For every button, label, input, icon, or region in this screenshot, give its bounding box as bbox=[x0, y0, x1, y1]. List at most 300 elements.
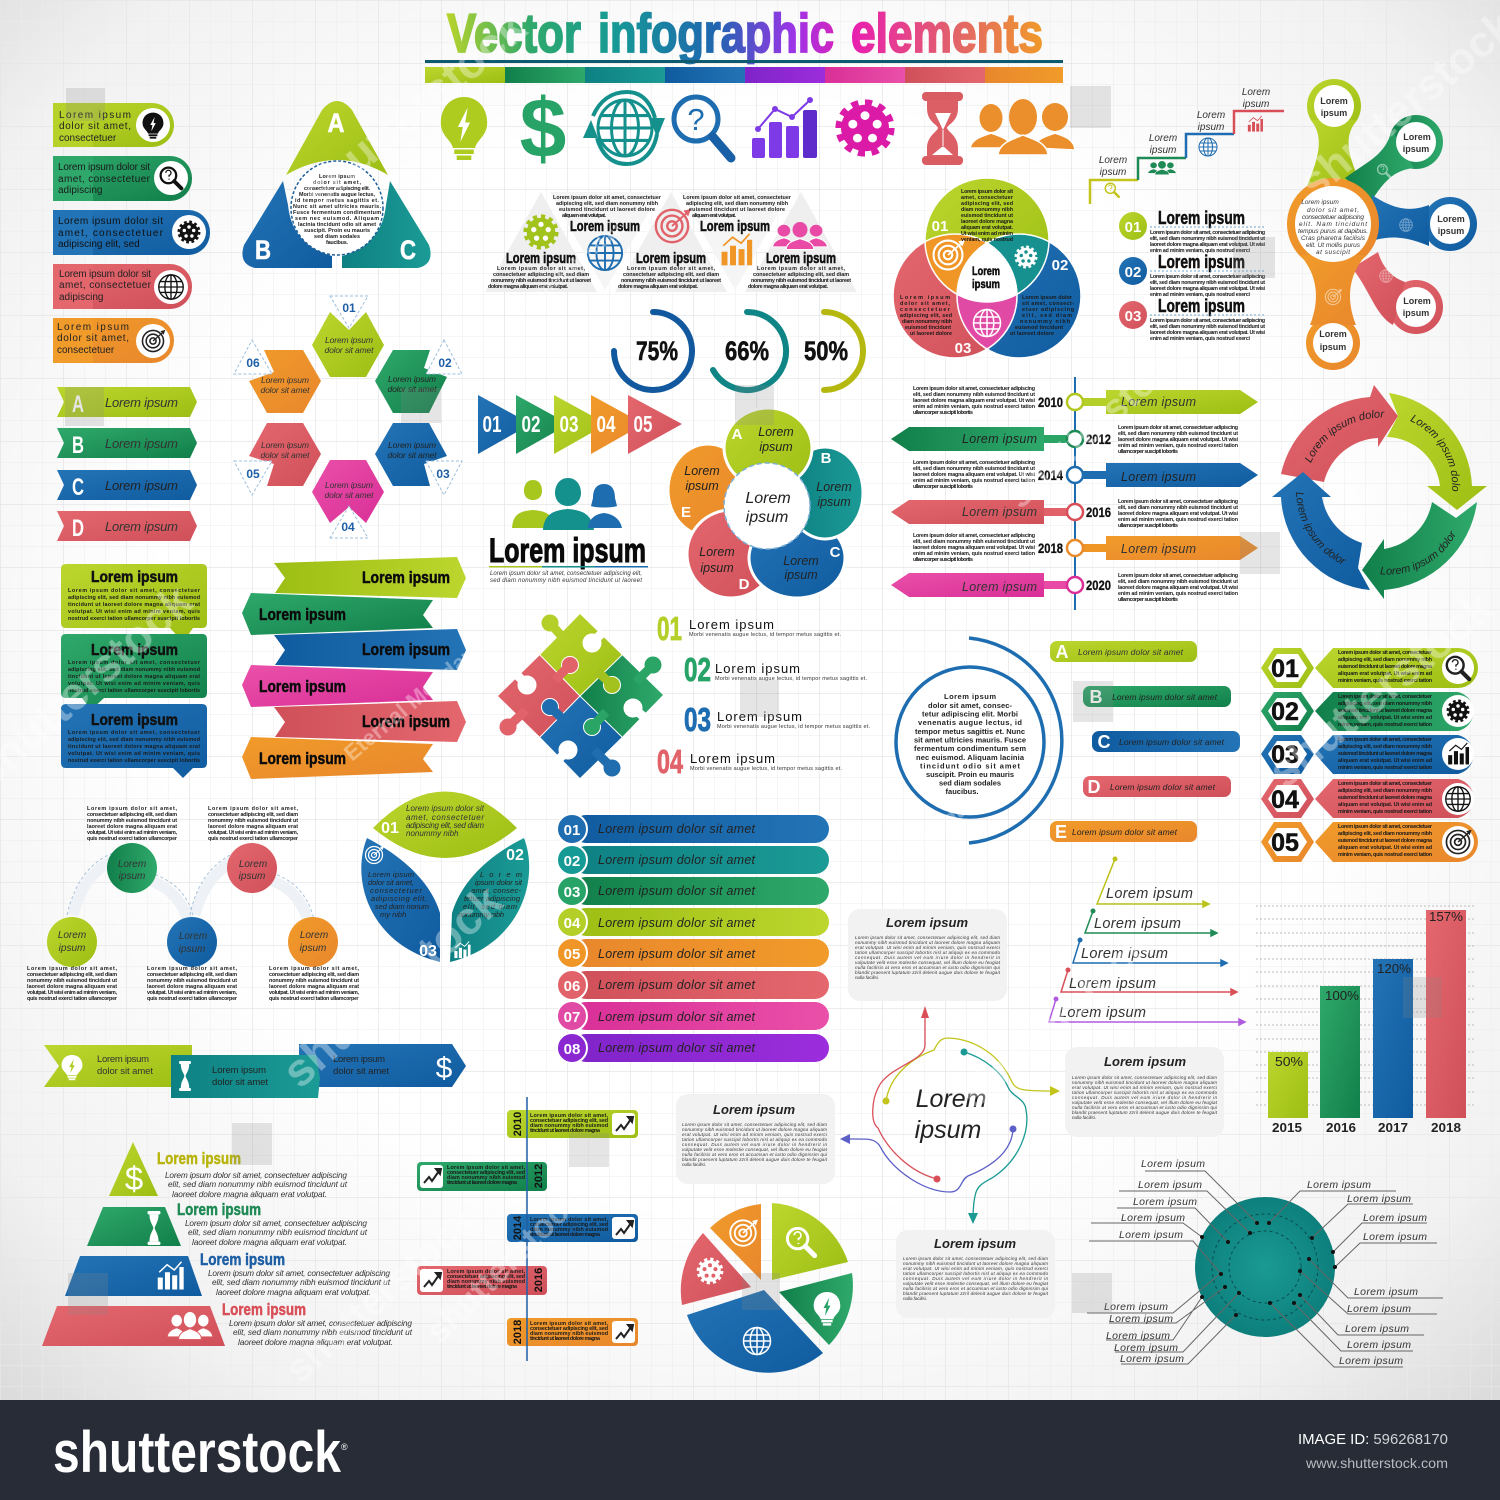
node blue bbox=[1372, 195, 1477, 251]
card left: consequat. Duis autem vel eum iriure dolor in hendrerit in bbox=[682, 1142, 827, 1147]
centre text: id tempor metus sagittis et. bbox=[295, 198, 380, 204]
petal letters: B bbox=[821, 450, 832, 467]
band 02: 02 bbox=[1271, 698, 1299, 726]
ribbon B bbox=[57, 428, 197, 459]
label arrow lime: Lorem ipsum bbox=[1106, 886, 1193, 902]
bar B: Lorem ipsum dolor sit amet bbox=[1112, 692, 1218, 702]
timeline text blocks: elit, sed diam nonummy nibh euismod tincidunt ut bbox=[1118, 505, 1238, 511]
node orange bbox=[288, 917, 338, 967]
card 2010: tincidunt ut laoreet dolore magna bbox=[530, 1128, 601, 1134]
list item 02: Lorem ipsum bbox=[1158, 252, 1245, 272]
venn outlines bbox=[893, 178, 1081, 358]
hexagon 04: 04 bbox=[341, 520, 355, 534]
tree text: nonummy nibh euismod tincidunt ut bbox=[147, 978, 237, 984]
band text: minim veniam, quis nostrud exerci tation bbox=[1338, 809, 1432, 815]
panel: staircase bbox=[1090, 87, 1284, 204]
card green: Lorem ipsum bbox=[91, 642, 178, 659]
pill red: adipiscing bbox=[59, 292, 103, 303]
venn text: etuer adipiscing bbox=[1022, 307, 1074, 313]
card lime: adipiscing elit, sed diam nonummy nibh euismod bbox=[68, 595, 200, 601]
level blue: laoreet dolore magna aliquam erat volutpat. bbox=[216, 1287, 371, 1297]
band 04: 04 bbox=[1271, 786, 1299, 814]
card 2018: diam nonummy nibh euismod bbox=[530, 1331, 608, 1337]
arrow 2010: Lorem ipsum bbox=[1121, 395, 1196, 409]
watermark overlay: shutterstock bbox=[277, 1198, 485, 1392]
panel: alternating ribbons bbox=[242, 557, 466, 779]
overlap orange bbox=[926, 234, 986, 293]
card blue: Lorem ipsum bbox=[91, 712, 178, 729]
hexagon 05 bbox=[234, 423, 321, 495]
label arrow green bbox=[1085, 908, 1217, 936]
petal labels: Lorem bbox=[816, 480, 852, 494]
radial labels: Lorem ipsum bbox=[1363, 1231, 1427, 1243]
dashed rings bbox=[1212, 1214, 1318, 1320]
band text: euismod tincidunt ut laoreet dolore magna bbox=[1338, 708, 1433, 714]
band text: minim veniam, quis nostrud exerci tation bbox=[1338, 722, 1432, 728]
petal letters: E bbox=[681, 504, 691, 521]
timeline text blocks: Lorem ipsum dolor sit amet, consectetuer adipiscing bbox=[1118, 573, 1238, 579]
bar 07 bbox=[557, 1001, 829, 1031]
circle text: sit amet ultricies mauris. Fusce bbox=[914, 736, 1026, 744]
venn text: elit, sed diam bbox=[1022, 313, 1072, 319]
card lime bbox=[61, 564, 207, 642]
leaf teal bbox=[450, 838, 529, 962]
circle blue bbox=[957, 234, 1081, 358]
band text: Lorem ipsum dolor sit amet, consectetuer bbox=[1338, 781, 1433, 787]
tree text: quis nostrud exerci tation ullamcorper bbox=[208, 836, 299, 842]
card blue: tincidunt ut laoreet dolore magna aliquam erat bbox=[68, 744, 200, 750]
circle text: faucibus. bbox=[946, 787, 978, 796]
tile titles: Lorem ipsum bbox=[766, 250, 836, 267]
timeline text blocks: elit, sed diam nonummy nibh euismod tincidunt ut bbox=[1118, 579, 1238, 585]
hexagon 03: 03 bbox=[436, 467, 450, 481]
radial labels: Lorem ipsum bbox=[1363, 1212, 1427, 1224]
card right: consequat. Duis autem vel eum iriure dolor in hendrerit in bbox=[1072, 1095, 1217, 1100]
tiles bbox=[485, 192, 857, 292]
hexagon 05: Lorem ipsum bbox=[261, 440, 309, 450]
tree text: consectetuer adipiscing elit, sed diam bbox=[147, 972, 237, 978]
card left: erat volutpat. Ut wisi enim ad minim veniam, quis nostrud exerci bbox=[682, 1132, 828, 1137]
card 2014 bbox=[507, 1214, 638, 1242]
interlocking seams bbox=[540, 614, 622, 737]
card bottom bbox=[896, 1230, 1055, 1318]
card bottom: Lorem ipsum bbox=[934, 1236, 1016, 1251]
title: Vector bbox=[447, 2, 581, 64]
faint node icons bbox=[1325, 165, 1412, 305]
circle text: Lorem ipsum bbox=[944, 692, 996, 701]
card blue: nostrud exerci tation ullamcorper suscipit lobortis bbox=[68, 758, 200, 764]
tree text: consectetuer adipiscing elit, sed diam bbox=[87, 812, 177, 818]
venn numbers: 03 bbox=[955, 340, 971, 357]
bar 01: Lorem ipsum dolor sit amet bbox=[598, 822, 756, 836]
panel: people heading bbox=[489, 478, 648, 584]
tile text: adipiscing elit, sed diam nonummy nibh bbox=[556, 201, 658, 207]
card 2010: consectetuer adipiscing elit, sed bbox=[530, 1118, 608, 1124]
item 02: Lorem ipsum bbox=[715, 661, 800, 676]
bar B bbox=[1083, 686, 1231, 707]
band text: adipiscing elit, sed diam nonummy nibh bbox=[1338, 657, 1432, 663]
ribbon A bbox=[57, 387, 197, 418]
venn text: Ut wisi enim ad minim bbox=[961, 231, 1013, 237]
icon: light bulb bbox=[441, 97, 487, 160]
bar 03 bbox=[557, 876, 829, 906]
ribbon magenta: Lorem ipsum bbox=[259, 677, 346, 696]
bar D: Lorem ipsum dolor sit amet bbox=[1110, 782, 1216, 792]
centre text circle bbox=[291, 161, 383, 255]
band text: minim veniam, quis nostrud exerci tation bbox=[1338, 765, 1432, 771]
list item 01: elit, sed diam nonummy nibh euismod tincidunt ut bbox=[1150, 236, 1265, 242]
card green: Lorem ipsum dolor sit amet, consectetuer bbox=[68, 660, 201, 666]
banner lime bbox=[44, 1045, 192, 1087]
timeline text blocks: Lorem ipsum dolor sit amet, consectetuer adipiscing bbox=[913, 533, 1035, 539]
pill green bbox=[53, 156, 192, 201]
band 01 bbox=[1261, 648, 1478, 688]
timeline cards bbox=[417, 1110, 638, 1346]
label arrow red bbox=[1061, 968, 1237, 995]
petal labels: Lorem bbox=[684, 464, 720, 478]
timeline text blocks: enim ad minim veniam, quis nostrud exerci tation bbox=[1118, 443, 1238, 449]
band text bbox=[1338, 650, 1433, 858]
bar 2017: 2017 bbox=[1378, 1120, 1408, 1135]
band text: Lorem ipsum dolor sit amet, consectetuer bbox=[1338, 824, 1433, 830]
leaf teal: tetuer adipiscing bbox=[464, 894, 521, 903]
ribbon lime bbox=[274, 557, 466, 598]
card bottom: nulla facilisis at vero eros et accumsan et iusto odio dignissim qui bbox=[903, 1286, 1049, 1291]
bar 08: Lorem ipsum dolor sit amet bbox=[598, 1041, 756, 1055]
tile text: Lorem ipsum dolor sit amet, bbox=[757, 266, 846, 272]
pill blue: Lorem ipsum dolor sit bbox=[58, 216, 163, 227]
tile text: consectetuer adipiscing elit, sed diam bbox=[493, 272, 589, 278]
panel: overlapping banners bbox=[44, 1044, 466, 1098]
list item 02: 02 bbox=[1125, 264, 1141, 281]
icon: rising bar chart bbox=[752, 97, 817, 158]
card bottom: Lorem ipsum dolor sit amet, consectetuer adipiscing elit, sed diam bbox=[903, 1256, 1048, 1261]
bar D: D bbox=[1088, 777, 1100, 797]
card 2016: consectetuer adipiscing elit, sed bbox=[447, 1274, 525, 1280]
icon: hourglass bbox=[922, 92, 963, 165]
card green bbox=[61, 634, 207, 710]
item 01: Morbi venenatis augue lectus, id tempor metus sagittis et. bbox=[689, 632, 841, 638]
circle text: nec euismod. Aliquam lacinia bbox=[916, 753, 1025, 762]
level green: elit, sed diam nonummy nibh euismod tincidunt ut bbox=[188, 1227, 368, 1237]
ribbon orange bbox=[242, 737, 433, 779]
band text: aliquam erat volutpat. Ut wisi enim ad bbox=[1338, 671, 1432, 677]
caption bbox=[490, 571, 642, 584]
bar 05: 05 bbox=[564, 946, 580, 963]
circle text: fermentum condimentum sem bbox=[914, 744, 1026, 753]
card 2012 bbox=[417, 1162, 547, 1191]
list item 01: laoreet dolore magna aliquam erat volutpat. Ut wisi bbox=[1150, 242, 1266, 248]
card top: erat volutpat. Ut wisi enim ad minim veniam, quis nostrud exerci bbox=[855, 945, 1001, 950]
panel: cycle arrows bbox=[1272, 385, 1487, 599]
tree text: laoreet dolore magna aliquam erat bbox=[27, 984, 117, 990]
bar 02 bbox=[557, 845, 829, 875]
panel: five-petal diagram bbox=[668, 408, 863, 598]
bar 04: 04 bbox=[564, 915, 581, 932]
card top: nulla facilisi. bbox=[855, 975, 879, 980]
panel: vertical timeline bbox=[417, 1097, 638, 1361]
card 2010: Lorem ipsum dolor sit amet, bbox=[530, 1113, 608, 1119]
ribbon A: A bbox=[72, 391, 84, 418]
overlap magenta bbox=[958, 296, 1016, 348]
band 05 bbox=[1261, 822, 1478, 862]
list item 03: laoreet dolore magna aliquam erat volutpat. Ut wisi bbox=[1150, 330, 1266, 336]
panel: numbered triangle arrows bbox=[478, 395, 682, 454]
leaf blue: adipiscing elit, bbox=[371, 894, 427, 903]
band text: Lorem ipsum dolor sit amet, consectetuer bbox=[1338, 694, 1433, 700]
node orange hub bbox=[1287, 178, 1379, 370]
watermark squares bbox=[65, 86, 1442, 1315]
circuit label bbox=[915, 1085, 986, 1144]
tree text: Lorem ipsum dolor sit amet, bbox=[87, 806, 178, 812]
segment C bbox=[342, 181, 431, 268]
step labels: Lorem bbox=[1242, 87, 1270, 98]
arrow 2018 bbox=[1038, 536, 1258, 560]
hexagon 04: dolor sit amet bbox=[324, 490, 374, 500]
panel: puzzle list bbox=[657, 610, 870, 780]
pill blue bbox=[53, 210, 210, 255]
venn text: diam nonummy nibh bbox=[961, 207, 1013, 213]
ribbon lime: Lorem ipsum bbox=[362, 568, 450, 587]
pill red: amet, consectetuer bbox=[59, 280, 152, 291]
leader dots bbox=[1200, 1221, 1337, 1317]
list item 03: Lorem ipsum bbox=[1158, 296, 1245, 316]
watermark overlay: Eternal Monday bbox=[838, 788, 983, 909]
circle text bbox=[914, 692, 1026, 796]
card 2012: Lorem ipsum dolor sit amet, bbox=[447, 1165, 526, 1171]
circle text: tetur adipiscing elit. Morbi bbox=[922, 710, 1018, 718]
pill blue: adipiscing elit, sed bbox=[58, 239, 140, 250]
ribbon green: Lorem ipsum bbox=[259, 605, 346, 624]
segment A bbox=[286, 101, 388, 175]
title bbox=[447, 2, 1043, 64]
venn icons bbox=[934, 240, 1036, 336]
card 2016: 2016 bbox=[533, 1268, 545, 1292]
outer arc bbox=[969, 638, 1062, 843]
node labels: ipsum bbox=[1320, 342, 1346, 352]
venn text: euismod tincidunt ut bbox=[961, 213, 1013, 219]
icon: dollar sign: $ bbox=[520, 81, 566, 175]
arrow 2010: 2010 bbox=[1038, 394, 1063, 410]
card bottom: consequat. Duis autem vel eum iriure dolor in hendrerit in bbox=[903, 1276, 1048, 1281]
bar 03: 03 bbox=[564, 884, 580, 901]
tree text: volutpat. Ut wisi enim ad minim veniam, bbox=[27, 990, 118, 996]
card lime: Lorem ipsum bbox=[91, 569, 178, 586]
image id: IMAGE ID: 596268170 bbox=[1298, 1431, 1448, 1448]
bar D bbox=[1083, 776, 1231, 797]
arrow 04: 04 bbox=[596, 411, 616, 437]
bar A: Lorem ipsum dolor sit amet bbox=[1078, 647, 1184, 657]
panel: venn diagram bbox=[893, 178, 1081, 358]
card green: tincidunt ut laoreet dolore magna aliquam erat bbox=[68, 674, 200, 680]
panel: text circle bbox=[896, 638, 1062, 843]
letters: C bbox=[400, 235, 416, 265]
panel: hex numbered bands bbox=[1261, 648, 1478, 862]
label arrow purple bbox=[1049, 996, 1245, 1025]
leaf lime: adipiscing elit, sed diam bbox=[406, 821, 484, 830]
band text: aliquam erat volutpat. Ut wisi enim ad bbox=[1338, 845, 1432, 851]
circuit label: Lorem bbox=[916, 1085, 986, 1113]
gauge 75%: 75% bbox=[636, 336, 678, 366]
band text: minim veniam, quis nostrud exerci tation bbox=[1338, 678, 1432, 684]
label arrow purple: Lorem ipsum bbox=[1059, 1005, 1146, 1021]
tree text: quis nostrud exerci tation ullamcorper bbox=[269, 996, 360, 1002]
ribbon D: D bbox=[72, 515, 84, 542]
caption: sed diam nonummy nibh euismod tincidunt ut laoreet bbox=[490, 578, 642, 584]
petal labels: ipsum bbox=[746, 509, 788, 526]
cycle labels bbox=[1296, 410, 1460, 575]
bar 01: 01 bbox=[564, 822, 580, 839]
bar 2016: 100% bbox=[1325, 988, 1359, 1003]
leaf blue: consectetuer bbox=[370, 886, 422, 895]
ribbon B: Lorem ipsum bbox=[105, 436, 178, 451]
bar A bbox=[1050, 641, 1197, 662]
tile text bbox=[488, 195, 851, 290]
node green: ipsum bbox=[119, 871, 145, 882]
card left: nulla facilisis at vero eros et accumsan et iusto odio dignissim qui bbox=[682, 1152, 828, 1157]
level green: Lorem ipsum bbox=[177, 1200, 261, 1219]
card 2010: 2010 bbox=[512, 1112, 524, 1136]
timeline axis bbox=[1074, 377, 1076, 610]
pill blue: amet, consectetuer bbox=[58, 228, 164, 239]
chart: growth bars bbox=[1256, 906, 1476, 1135]
centre text: Nunc sit amet ultricies mauris. bbox=[293, 204, 382, 210]
node red: Lorem bbox=[239, 859, 267, 870]
venn centre label: ipsum bbox=[972, 277, 1000, 291]
petal E bbox=[668, 444, 748, 536]
bar 08: 08 bbox=[564, 1041, 580, 1058]
bar 06 bbox=[557, 970, 829, 1000]
ribbon blue bbox=[274, 629, 466, 670]
band text: adipiscing elit, sed diam nonummy nibh bbox=[1338, 701, 1432, 707]
hub text: Cras pharetra facilisis bbox=[1301, 235, 1366, 242]
registered mark: ® bbox=[341, 1442, 348, 1452]
centre text: sem nec euismod. Aliquam bbox=[295, 216, 379, 222]
timeline text blocks: enim ad minim veniam, quis nostrud exerci tation bbox=[913, 551, 1035, 557]
panel: A B C D ribbons bbox=[57, 387, 197, 542]
petal C bbox=[749, 518, 845, 598]
pill lime: consectetuer bbox=[59, 133, 117, 144]
hub text: dolor sit amet, bbox=[1307, 207, 1359, 214]
arrow 01 bbox=[478, 395, 531, 454]
card right: erat volutpat. Ut wisi enim ad minim veniam, quis nostrud exerci bbox=[1072, 1085, 1218, 1090]
card green: volutpat. Ut wisi enim ad minim veniam, quis bbox=[68, 681, 200, 687]
node red bbox=[1352, 252, 1443, 334]
label arrow lime bbox=[1097, 856, 1209, 907]
venn text: dolor sit amet, bbox=[900, 301, 950, 307]
node lime: ipsum bbox=[59, 943, 85, 954]
list item 03: Lorem ipsum dolor sit amet, consectetuer adipiscing bbox=[1150, 318, 1265, 324]
leader lines bbox=[1087, 1171, 1443, 1367]
card top: nonummy nibh euismod tincidunt ut laoreet dolore magna aliquam bbox=[855, 940, 1000, 945]
node labels: ipsum bbox=[1438, 226, 1464, 236]
leaf teal: 02 bbox=[506, 847, 524, 864]
tile text: nonummy nibh euismod tincidunt ut laoreet bbox=[621, 278, 721, 284]
panel: pyramid bbox=[42, 1142, 413, 1347]
bar 02: Lorem ipsum dolor sit amet bbox=[598, 853, 756, 867]
band text: aliquam erat volutpat. Ut wisi enim ad bbox=[1338, 802, 1432, 808]
pill orange bbox=[53, 318, 174, 363]
pill red: Lorem ipsum dolor sit bbox=[59, 269, 151, 280]
card left: blandit praesent luptatum zzril delenit augue duis dolore te feugait bbox=[682, 1157, 828, 1162]
cycle labels: Lorem ipsum dolor bbox=[1410, 414, 1460, 492]
hub text: at suscipit bbox=[1316, 249, 1351, 256]
ribbon A: Lorem ipsum bbox=[105, 395, 178, 410]
level red bbox=[42, 1300, 413, 1347]
letters: B bbox=[255, 235, 271, 265]
tree text: laoreet dolore magna aliquam erat bbox=[87, 824, 177, 830]
arrow 02 bbox=[516, 395, 569, 454]
radial labels: Lorem ipsum bbox=[1347, 1339, 1411, 1351]
title colour strip bbox=[425, 60, 1063, 83]
leaf blue: my nibh bbox=[380, 910, 406, 919]
panel: numbered list 01-03 bbox=[1119, 208, 1266, 342]
tree text: Lorem ipsum dolor sit amet, bbox=[269, 966, 360, 972]
card right: tation ullamcorper suscipit lobortis nisl ut aliquip ex ea commodo bbox=[1072, 1090, 1217, 1095]
tree text: Lorem ipsum dolor sit amet, bbox=[147, 966, 238, 972]
band 02 bbox=[1261, 692, 1474, 731]
venn numbers: 01 bbox=[932, 218, 948, 235]
leaf lime: amet, consectetuer bbox=[406, 813, 484, 822]
line olive bbox=[882, 1038, 1060, 1104]
bar 2017: 120% bbox=[1377, 961, 1411, 976]
card 2014: diam nonummy nibh euismod bbox=[530, 1227, 608, 1233]
card right: vulputate velit esse molestie consequat, vel illum dolore eu feugiat bbox=[1072, 1100, 1218, 1105]
banner blue: Lorem ipsum bbox=[333, 1054, 385, 1065]
cycle arrow lime bbox=[1387, 393, 1487, 510]
card right: nulla facilisis at vero eros et accumsan et iusto odio dignissim qui bbox=[1072, 1105, 1218, 1110]
band text: aliquam erat volutpat. Ut wisi enim ad bbox=[1338, 758, 1432, 764]
ribbon orange: Lorem ipsum bbox=[259, 749, 346, 768]
tile text: nonummy nibh euismod tincidunt ut laoreet bbox=[491, 278, 591, 284]
arrow 2014: Lorem ipsum bbox=[1121, 470, 1196, 484]
band text: euismod tincidunt ut laoreet dolore magna bbox=[1338, 795, 1433, 801]
pill green: Lorem ipsum dolor sit bbox=[58, 162, 150, 173]
level lime: elit, sed diam nonummy nibh euismod tincidunt ut bbox=[168, 1179, 348, 1189]
arrow 04 bbox=[591, 395, 644, 454]
bar 2018 bbox=[1426, 909, 1466, 1135]
slice orange bbox=[710, 1204, 761, 1280]
card 2012: diam nonummy nibh euismod bbox=[447, 1175, 525, 1181]
item 04 bbox=[657, 743, 842, 780]
tile text: dolore magna aliquam erat volutpat. bbox=[488, 284, 568, 290]
card 2014: Lorem ipsum dolor sit amet, bbox=[530, 1217, 608, 1223]
card 2012: 2012 bbox=[533, 1164, 545, 1188]
node labels bbox=[1319, 96, 1465, 352]
venn text: euismod tincidunt bbox=[905, 325, 951, 331]
teal disc bbox=[1195, 1197, 1335, 1337]
venn text: Lorem ipsum dolor bbox=[1022, 295, 1073, 301]
hexagon 04 bbox=[312, 460, 384, 538]
step icons bbox=[1105, 116, 1263, 197]
pie icons bbox=[699, 1220, 840, 1354]
level blue: Lorem ipsum bbox=[200, 1250, 285, 1269]
venn text: aliquam erat volutpat. bbox=[961, 225, 1014, 231]
hexagon 06: Lorem ipsum bbox=[261, 375, 309, 385]
card top: nulla facilisis at vero eros et accumsan et iusto odio dignissim qui bbox=[855, 965, 1001, 970]
item 03: 03 bbox=[684, 701, 711, 738]
item 04: Morbi venenatis augue lectus, id tempor metus sagittis et. bbox=[690, 766, 842, 772]
leaf lime: Lorem ipsum dolor sit bbox=[406, 804, 485, 813]
title: elements bbox=[851, 2, 1043, 64]
ribbon D bbox=[57, 511, 197, 542]
bar 08 bbox=[557, 1033, 829, 1063]
petal labels: ipsum bbox=[784, 568, 818, 582]
level green: Lorem ipsum dolor sit amet, consectetuer adipiscing bbox=[185, 1218, 367, 1228]
timeline text blocks: ullamcorper suscipit lobortis bbox=[1118, 449, 1178, 455]
arrow 05: 05 bbox=[634, 411, 653, 437]
tile text: Lorem ipsum dolor sit amet, consectetuer bbox=[683, 195, 792, 201]
